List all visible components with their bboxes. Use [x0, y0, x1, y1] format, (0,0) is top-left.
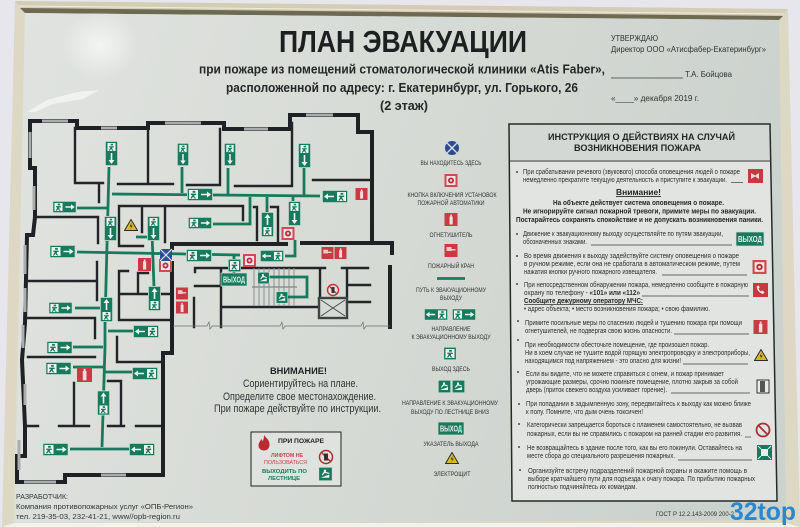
item: alarm: При срабатывании речевого (звукового) способа оповещения людей о пожаре [523, 168, 740, 176]
item: phone: При непосредственном обнаружении пожара, немедленно сообщите в пожарную [524, 281, 748, 289]
subtitle: расположенной по адресу: г. Екатеринбург, ул. Горького, 26 [226, 80, 578, 95]
exit sign on plan: ВЫХОД [223, 276, 245, 284]
approval block: УТВЕРЖДАЮ [611, 34, 658, 43]
panel heading: ИНСТРУКЦИЯ О ДЕЙСТВИЯХ НА СЛУЧАЙ [548, 131, 735, 143]
attention block: Не игнорируйте сигнал пожарной тревоги, примите меры по эвакуации. [523, 208, 756, 216]
item: close door: Если вы видите, что не можете справиться с огнем, и пожар принимает [526, 371, 725, 378]
item: do not fight fire: пожарных, если вы не справились с пожаром на ранней стадии его развития. [527, 430, 742, 438]
legend: stairs direction: НАПРАВЛЕНИЕ К ЭВАКУАЦИОННОМУ [402, 401, 498, 407]
legend: hydrant: ПОЖАРНЫЙ КРАН [428, 262, 474, 270]
item: alarm: немедленно прекратите текущую деятельность и приступите к эвакуации. [523, 177, 727, 184]
fire warning box: ПОЛЬЗОВАТЬСЯ [264, 460, 307, 466]
legend: route line: ВЫХОДУ [440, 296, 462, 302]
item: movement: ВЫХОД [738, 234, 762, 244]
item: alarm [516, 168, 763, 184]
fire warning box: ЛЕСТНИЦЕ [268, 476, 300, 482]
no lift icon [328, 284, 338, 296]
legend: fire button: ПОЖАРНОЙ АВТОМАТИКИ [418, 199, 484, 207]
subtitle: при пожаре из помещений стоматологической клиники «Atis Faber», [199, 62, 605, 76]
watermark: 32top [730, 498, 796, 526]
horizontal exit signs [43, 188, 348, 456]
exit sign on plan [221, 273, 247, 286]
item: meet firefighters: выборе кратчайшего пути для подъезда к очагу пожара. По прибытию пожарных [528, 475, 755, 483]
item: manual call point: Во время движения к выходу задействуйте систему оповещения о пожаре [524, 252, 739, 260]
instruction panel [509, 124, 777, 501]
floor plan [17, 115, 392, 482]
legend: route line: ПУТЬ К ЭВАКУАЦИОННОМУ [416, 288, 486, 294]
staircase [252, 268, 297, 306]
approval block: «____» декабря 2019 г. [611, 94, 699, 103]
legend: direction signs: НАПРАВЛЕНИЕ [432, 327, 470, 333]
item: do not return: месте сбора до специального разрешения пожарных. [527, 452, 675, 460]
legend: exit pointer: УКАЗАТЕЛЬ ВЫХОДА [424, 442, 478, 448]
item: extinguish: огнетушителей, не подвергая свою жизнь опасности. [525, 327, 672, 335]
item: movement: Движение к эвакуационному выходу осуществляйте по путям эвакуации, [523, 230, 723, 238]
developer credits: РАЗРАБОТЧИК: [16, 492, 68, 501]
you are here marker [160, 249, 172, 261]
break line [173, 322, 390, 329]
legend: exit here [432, 347, 470, 373]
attention block: На объекте действует система оповещения о пожаре. [553, 199, 724, 207]
vertical exit signs [97, 141, 311, 415]
electrical panel icon [124, 220, 138, 230]
panel heading [548, 131, 735, 154]
item: smoke: При попадании в задымленную зону, передвигайтесь к выходу как можно ближе [526, 400, 751, 408]
legend: extinguisher [430, 213, 473, 239]
item: meet firefighters: Организуйте встречу подразделений пожарной охраны и окажите помощь в [528, 467, 747, 475]
item: movement: обозначенных знаками. [523, 238, 587, 246]
stair exit signs [228, 259, 288, 303]
attention note: ВНИМАНИЕ! [270, 366, 327, 377]
item: do not fight fire [518, 421, 770, 438]
icon: flame [258, 435, 270, 450]
item: manual call point: в ручном режиме, если она не сработала в автоматическом режиме, путем [524, 260, 740, 268]
item: movement [516, 230, 764, 246]
legend: direction signs [412, 309, 491, 341]
item: phone [516, 281, 768, 313]
legend: fire button: КНОПКА ВКЛЮЧЕНИЯ УСТАНОВОК [408, 193, 497, 199]
item: manual call point [516, 252, 766, 276]
subtitle: (2 этаж) [380, 98, 428, 113]
evacuation routes [70, 167, 320, 449]
fire warning box: ЛИФТОМ НЕ [271, 453, 303, 459]
fire warning box [251, 432, 341, 486]
legend: fire button [408, 174, 497, 207]
attention note: Определите свое местонахождение. [223, 391, 376, 403]
title: ПЛАН ЭВАКУАЦИИ [279, 24, 527, 59]
outer walls [17, 115, 392, 482]
legend: exit here: ВЫХОД ЗДЕСЬ [432, 367, 470, 373]
glare on plaque [27, 11, 138, 112]
attention block: Внимание! [616, 187, 661, 197]
fire warning box: ВЫХОДИТЬ ПО [262, 469, 308, 475]
item: extinguish [517, 319, 768, 335]
legend: route line [416, 278, 486, 302]
item: do not return: Не возвращайтесь в здание после того, как вы его покинули. Оставайтесь на [527, 444, 742, 452]
legend: direction signs: К ЭВАКУАЦИОННОМУ ВЫХОДУ [412, 335, 491, 341]
fire warning box: ПРИ ПОЖАРЕ [278, 438, 325, 445]
legend: exit pointer: ВЫХОД [440, 424, 462, 434]
legend: exit pointer [424, 422, 478, 448]
item: meet firefighters [519, 467, 755, 491]
item: close door: угрожающие размеры, срочно покиньте помещение, плотно закрыв за собой [526, 378, 738, 386]
subtitle [199, 62, 605, 113]
approval block: Т.А. Бойцова [685, 70, 733, 79]
legend: stairs direction: ВЫХОДУ ПО ЛЕСТНИЦЕ ВНИЗ [411, 410, 489, 416]
item: extinguish: Примите посильные меры по спасению людей и тушению пожара при помощи [525, 319, 742, 327]
item: smoke [518, 400, 751, 416]
interior walls [25, 123, 370, 426]
developer credits [16, 492, 193, 521]
legend [402, 141, 498, 478]
item: power off [517, 339, 768, 365]
icon: stairs [319, 467, 332, 481]
legend: electrical panel [434, 452, 471, 478]
attention note: Сориентируйтесь на плане. [243, 378, 358, 390]
attention block: Постарайтесь сохранять спокойствие и не допускать возникновения паники. [516, 216, 763, 224]
developer credits: тел. 219-35-03, 232-41-21, www//opb-region.ru [16, 512, 180, 521]
legend: hydrant [428, 244, 474, 270]
item: manual call point: нажатия кнопки ручного пожарного извещателя. [524, 269, 657, 276]
approval block [611, 34, 767, 103]
legend: electrical panel: ЭЛЕКТРОЩИТ [434, 472, 471, 478]
attention note [214, 366, 381, 415]
fire equipment [77, 188, 368, 382]
item: meet firefighters: полностью подчиняйтесь их командам. [528, 483, 637, 491]
item: phone: • адрес объекта; • место возникновения пожара; • свою фамилию. [524, 305, 710, 313]
attention block [516, 187, 763, 224]
icon: no lift [320, 450, 332, 464]
developer credits: Компания противопожарных услуг «ОПБ-Регион» [16, 502, 193, 511]
item: phone: охрану по телефону - «101» или «112» [524, 290, 640, 297]
standard reference: ГОСТ Р 12.2.143-2009 200-2 [656, 511, 734, 518]
item: smoke: к полу. Помните, что дым очень токсичен! [526, 409, 643, 416]
legend: you are here: ВЫ НАХОДИТЕСЬ ЗДЕСЬ [420, 161, 482, 167]
approval block: Директор ООО «Атисфабер-Екатеринбург» [611, 45, 767, 54]
panel heading: ВОЗНИКНОВЕНИЯ ПОЖАРА [574, 143, 701, 154]
legend: you are here [420, 141, 482, 167]
item: power off: находящимся под напряжением - это опасно для жизни! [525, 358, 681, 365]
item: close door [517, 371, 769, 394]
item: power off: При необходимости обесточьте помещение, где произошел пожар. [525, 341, 709, 349]
item: close door: дверь (приток свежего воздуха усиливает горение). [526, 387, 667, 394]
item: do not return [518, 444, 772, 460]
legend: extinguisher: ОГНЕТУШИТЕЛЬ [430, 233, 473, 239]
item: do not fight fire: Категорически запрещается бороться с пламенем самостоятельно, не вызвав [527, 421, 742, 429]
item: phone: Сообщите дежурному оператору МЧС: [524, 297, 643, 305]
panel frame [509, 124, 777, 501]
elevator [319, 298, 347, 318]
item: power off: Ни в коем случае не тушите водой горящую электропроводку и электроприборы, [525, 349, 750, 357]
attention note: При пожаре действуйте по инструкции. [214, 403, 381, 415]
legend: stairs direction [402, 380, 498, 416]
